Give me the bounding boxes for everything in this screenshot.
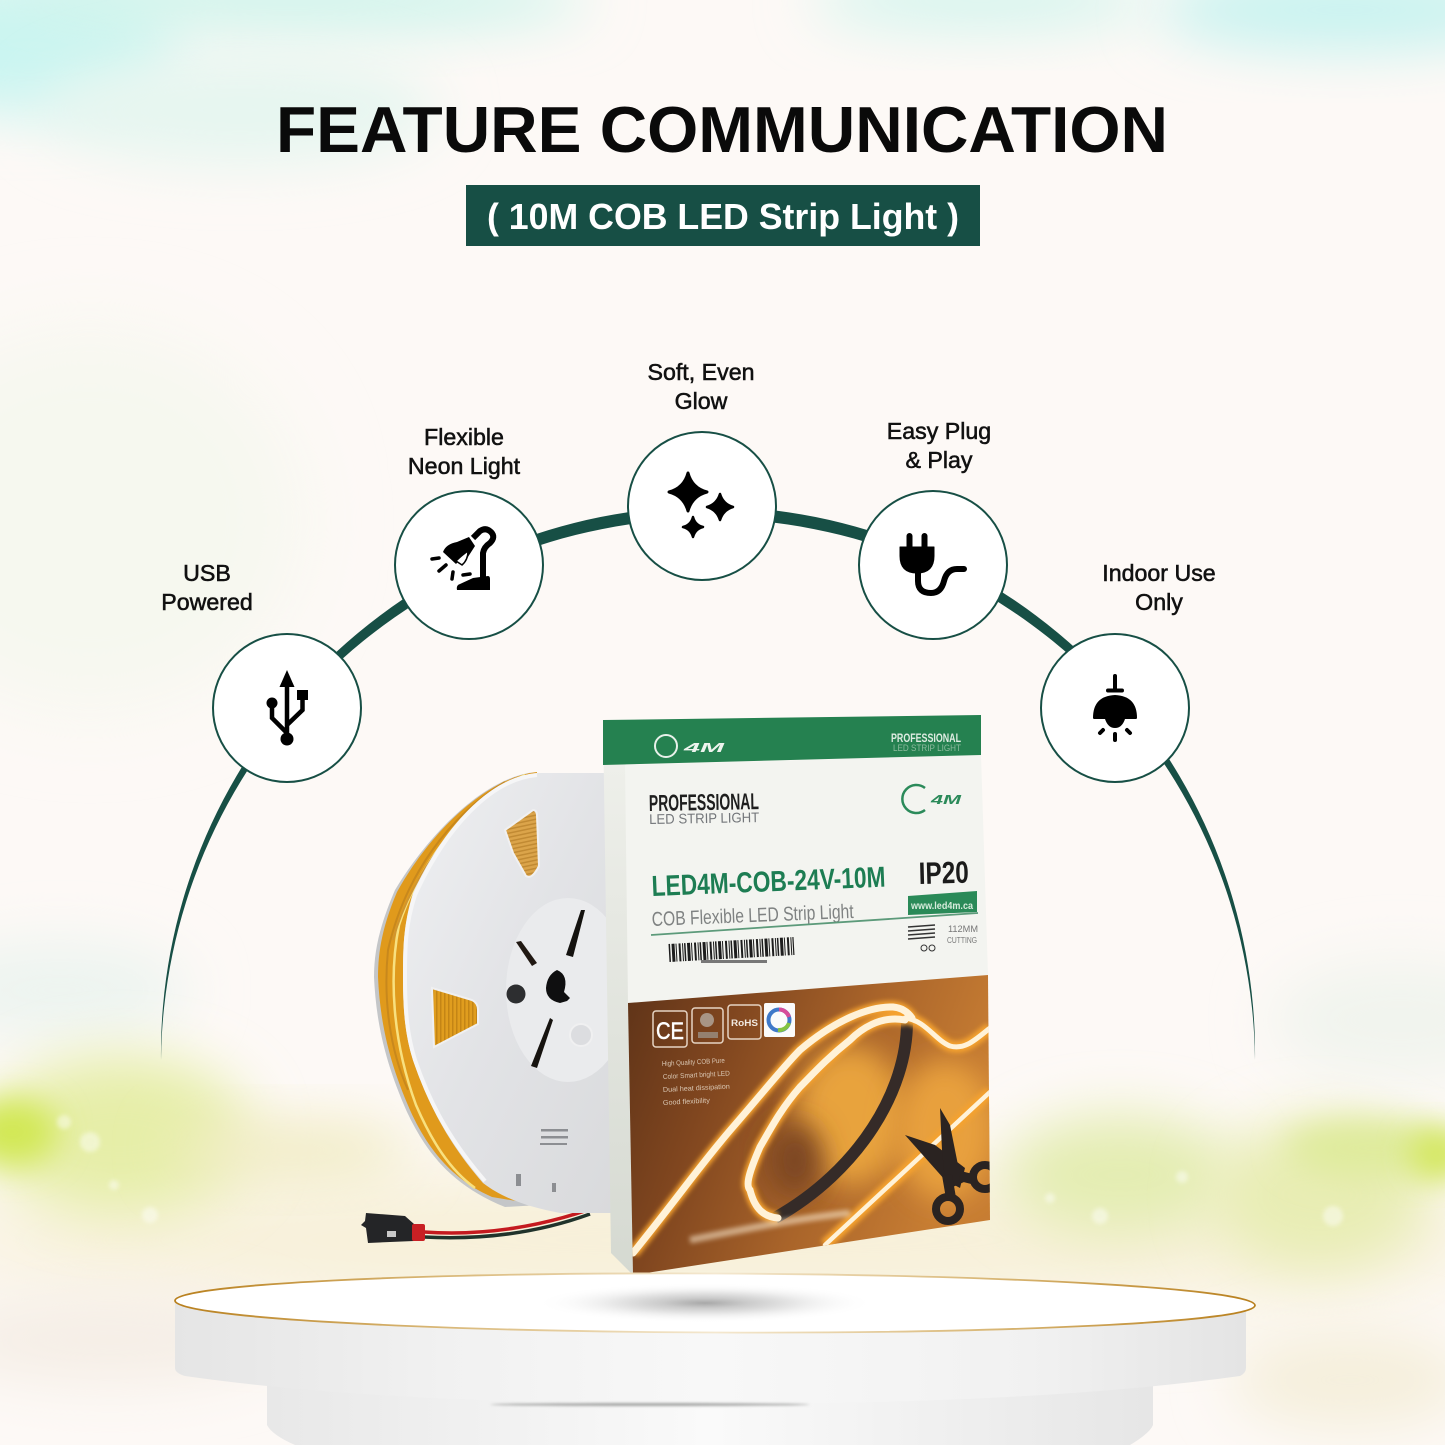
box heading: PROFESSIONAL — [649, 788, 759, 816]
header logo: 4M — [682, 740, 727, 755]
strip glow — [633, 1007, 990, 1253]
circle: plug — [859, 491, 1007, 639]
product: retail box — [603, 715, 997, 1275]
box front panel — [625, 755, 988, 1003]
feature: USB Powered — [161, 560, 361, 782]
certification marks: CE — [656, 1018, 684, 1045]
box cutting mark: CUTTING — [947, 936, 977, 945]
circle: pendant lamp — [1041, 634, 1189, 782]
label: Easy Plug & Play: Easy Plug — [887, 418, 991, 444]
box heading — [649, 788, 760, 827]
certification marks — [653, 1003, 795, 1047]
arc connecting features — [161, 506, 1255, 1060]
reel face — [403, 773, 612, 1213]
podium shadow — [535, 1283, 875, 1323]
reel upper window — [505, 810, 539, 877]
feature: Easy Plug & Play — [859, 418, 1007, 639]
label: Easy Plug & Play: & Play — [905, 447, 973, 473]
feature bullets: Dual heat dissipation — [663, 1083, 730, 1094]
icon: sparkles — [669, 473, 733, 537]
icon: pendant lamp — [1093, 676, 1137, 740]
box barcode — [669, 946, 794, 963]
label: USB Powered: USB — [183, 560, 231, 586]
label: USB Powered: Powered — [161, 589, 253, 615]
box description: COB Flexible LED Strip Light — [651, 901, 854, 931]
feature: Soft, Even Glow — [628, 359, 776, 580]
subtitle banner: ( 10M COB LED Strip Light ) — [487, 196, 959, 237]
circle: USB — [213, 634, 361, 782]
feature bullets: Good flexibility — [663, 1098, 711, 1107]
box brown photo panel — [628, 975, 997, 1275]
reel sticker — [516, 1129, 568, 1192]
podium lower tier — [267, 1385, 1153, 1445]
box logo — [902, 785, 963, 813]
product: LED strip reel — [361, 772, 630, 1243]
feature: Flexible Neon Light — [395, 424, 543, 639]
circle: sparkle — [628, 432, 776, 580]
box website tag — [908, 891, 977, 915]
box cutting mark: 112MM — [948, 924, 978, 934]
icon: scissors — [905, 1108, 997, 1221]
box divider — [651, 913, 978, 935]
label: Indoor Use Only: Only — [1135, 589, 1183, 615]
podium upper tier — [175, 1303, 1246, 1404]
feature: Indoor Use Only — [1041, 560, 1216, 782]
podium top surface — [175, 1271, 1255, 1335]
reel lower window — [432, 988, 478, 1047]
header text: PROFESSIONAL — [891, 731, 961, 745]
label: Indoor Use Only: Indoor Use — [1102, 560, 1216, 586]
title: FEATURE COMMUNICATION — [276, 93, 1168, 166]
reel hub — [506, 898, 608, 1082]
label: Flexible Neon Light: Neon Light — [408, 453, 521, 479]
header logo — [655, 735, 727, 757]
strip back (dark) — [775, 1022, 907, 1218]
box model number: LED4M-COB-24V-10M — [651, 862, 886, 903]
box cutting mark — [908, 924, 978, 951]
box side spine — [603, 720, 633, 1275]
box green header — [603, 715, 981, 765]
certification marks: RoHS — [731, 1018, 758, 1028]
box logo: 4M — [929, 792, 963, 807]
circle: lamp — [395, 491, 543, 639]
icon: USB symbol — [266, 670, 308, 746]
label: Flexible Neon Light: Flexible — [424, 424, 504, 450]
subtitle banner — [466, 185, 980, 246]
label: Soft, Even Glow: Glow — [675, 388, 728, 414]
icon: desk lamp — [432, 529, 493, 590]
feature bullets — [662, 1058, 730, 1107]
strip light core — [633, 1007, 990, 1253]
podium — [175, 1271, 1255, 1445]
icon: plug and cable — [900, 536, 964, 593]
box green header: LED STRIP LIGHT — [893, 743, 961, 753]
feature bullets: High Quality COB Pure — [662, 1058, 725, 1068]
box IP rating: IP20 — [918, 855, 969, 891]
box website tag: www.led4m.ca — [910, 901, 973, 912]
box heading: LED STRIP LIGHT — [649, 809, 760, 827]
reel wound edge — [374, 772, 540, 1207]
label: Soft, Even Glow: Soft, Even — [648, 359, 754, 385]
feature bullets: Color Smart bright LED — [663, 1071, 730, 1081]
reel wire and connector — [361, 1201, 612, 1243]
